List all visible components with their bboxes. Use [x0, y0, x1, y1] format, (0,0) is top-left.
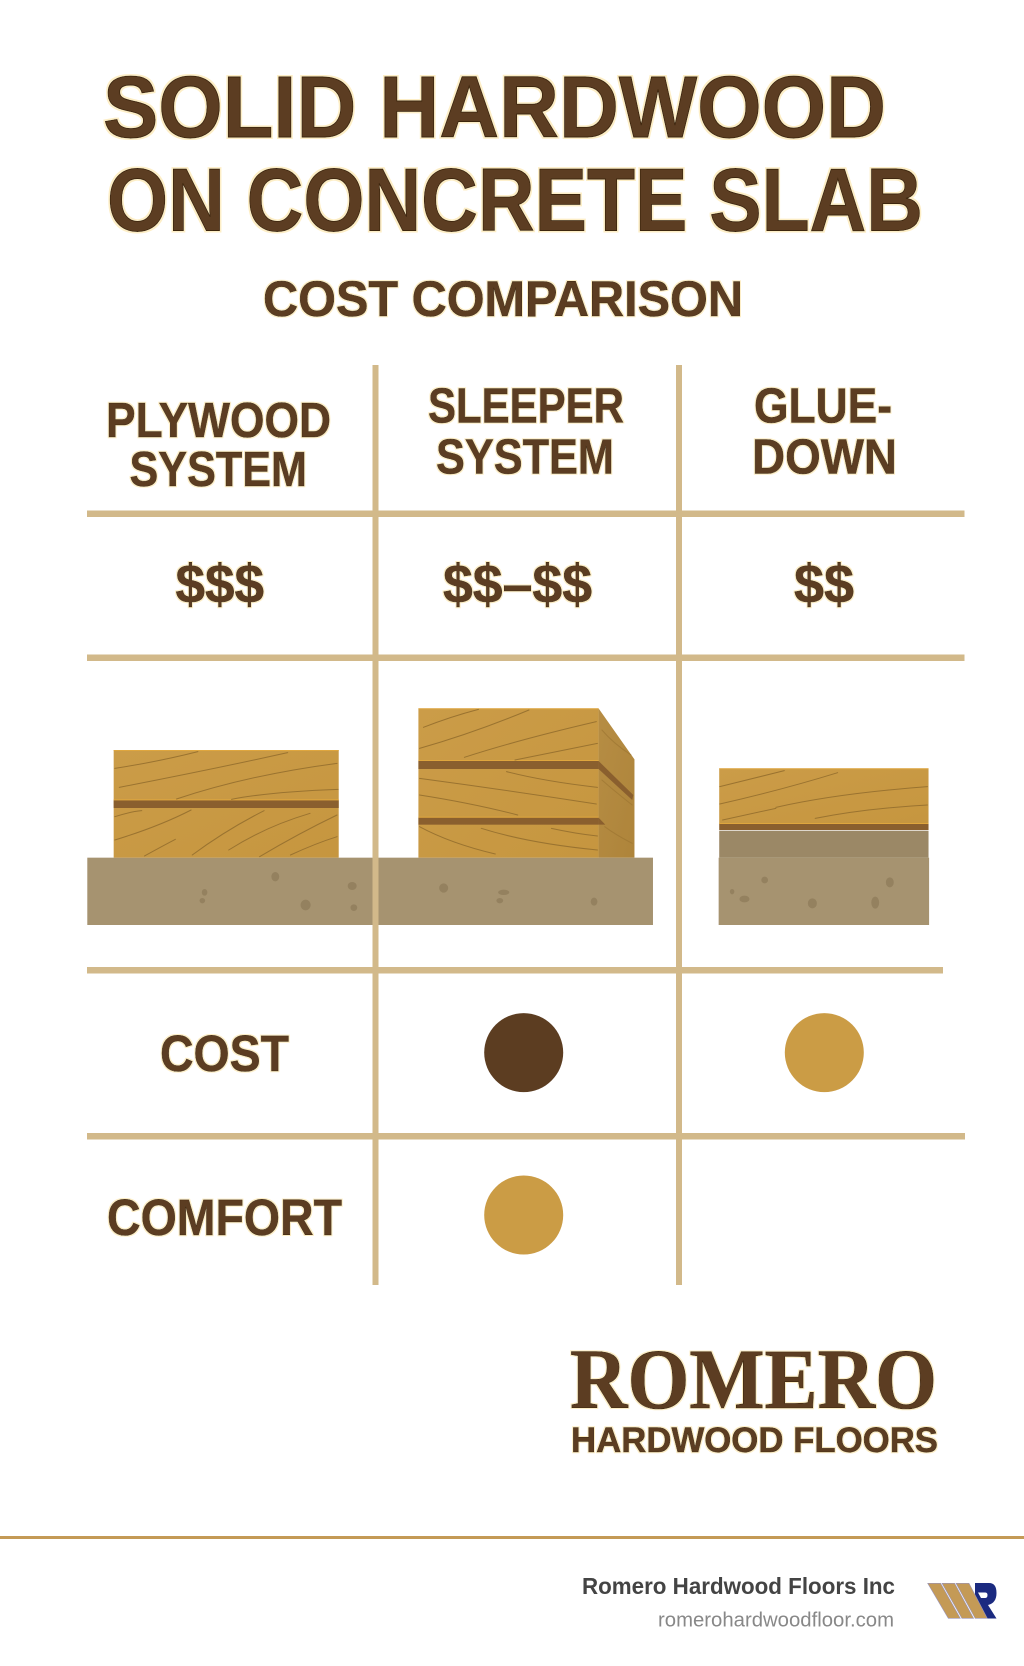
column heading: glue-down	[752, 380, 897, 484]
rating dot: comfort, sleeper	[484, 1176, 563, 1254]
table grid lines	[87, 510, 965, 1140]
footer company name: Romero Hardwood Floors Inc	[582, 1573, 895, 1599]
title	[103, 59, 923, 250]
column heading: glue-down: DOWN	[752, 430, 897, 484]
diagram: plywood system wood layers	[114, 750, 339, 858]
footer url: romerohardwoodfloor.com	[658, 1608, 894, 1632]
brand wordmark: HARDWOOD FLOORS	[571, 1421, 938, 1460]
footer divider	[0, 1536, 1024, 1539]
price: sleeper: $$–$$	[443, 553, 592, 615]
column heading: glue-down: GLUE-	[754, 380, 892, 434]
brand wordmark: ROMERO	[570, 1331, 937, 1427]
diagram: sleeper system wood layers	[418, 708, 634, 858]
icon: company logo	[928, 1583, 996, 1618]
column heading: plywood system: SYSTEM	[130, 443, 307, 497]
row label: cost: COST	[160, 1025, 289, 1082]
diagram: glue-down wood layer and slab	[719, 768, 929, 925]
row label: comfort: COMFORT	[107, 1189, 342, 1246]
column heading: sleeper system: SLEEPER	[428, 380, 624, 434]
price: plywood: $$$	[176, 553, 264, 615]
rating dot: cost, sleeper	[484, 1013, 563, 1092]
price: glue-down: $$	[794, 553, 854, 615]
column heading: sleeper system	[428, 380, 624, 484]
column heading: plywood system: PLYWOOD	[106, 394, 331, 448]
column heading: plywood system	[106, 394, 331, 497]
subtitle: COST COMPARISON	[263, 271, 743, 327]
title: SOLID HARDWOOD	[103, 59, 886, 156]
column heading: sleeper system: SYSTEM	[436, 430, 614, 484]
vertical grid lines	[372, 365, 682, 1285]
rating dot: cost, glue-down	[785, 1013, 864, 1092]
title: ON CONCRETE SLAB	[107, 150, 923, 250]
diagram: concrete slab under plywood and sleeper	[87, 858, 653, 925]
